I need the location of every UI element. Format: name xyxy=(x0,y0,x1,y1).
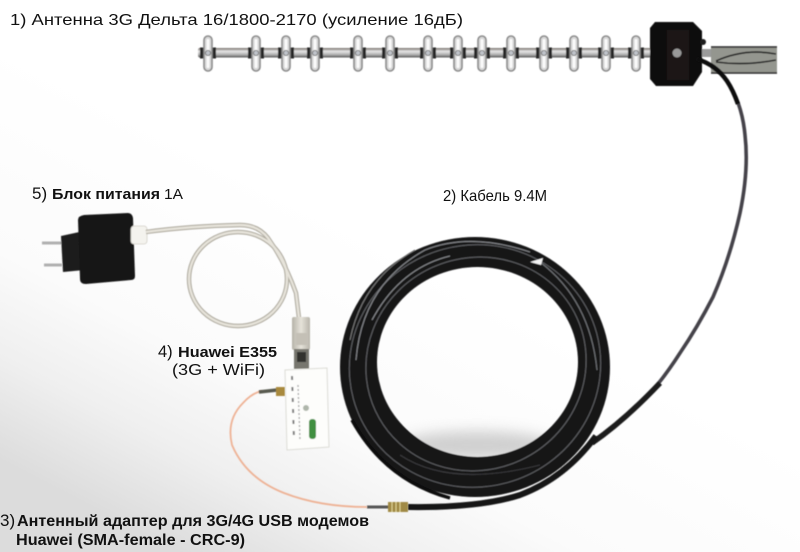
label 3: adapter line 1: 3) xyxy=(0,511,15,530)
label 5: power supply: Блок питания xyxy=(52,186,160,203)
coil highlights xyxy=(322,217,628,515)
USB plug xyxy=(292,317,310,369)
label 4: modem subtitle: (3G + WiFi) xyxy=(172,362,265,379)
USB mini plug xyxy=(131,226,147,244)
white cable label xyxy=(530,258,543,265)
cable tail to connector xyxy=(352,420,450,498)
antenna cable xyxy=(592,59,746,443)
label 2: cable: 2) Кабель 9.4М xyxy=(443,188,547,205)
plug pins xyxy=(42,242,62,266)
modem LED window xyxy=(309,419,316,439)
label 5: power supply: 1А xyxy=(164,187,183,203)
label 3: adapter line 2: Huawei (SMA-female - CRC-9) xyxy=(16,532,245,549)
label 4: modem: 4) xyxy=(158,343,173,361)
modem body xyxy=(285,368,329,450)
label 5: power supply xyxy=(32,184,183,203)
antenna boom xyxy=(198,48,658,58)
USB cable xyxy=(146,225,299,326)
antenna xyxy=(198,22,777,86)
label 4: modem: Huawei E355 xyxy=(178,344,277,361)
orange pigtail cable xyxy=(230,391,367,507)
coil ring xyxy=(340,237,610,497)
pigtail grey end and gold connector xyxy=(259,387,285,396)
Huawei E355 modem xyxy=(285,368,329,450)
SMA/CRC-9 adapter connector xyxy=(367,502,408,512)
mounting bracket xyxy=(700,47,777,73)
coiled cable xyxy=(322,217,628,515)
charger body xyxy=(78,213,135,284)
antenna elements xyxy=(200,36,644,71)
label 1: antenna: 1) Антенна 3G Дельта 16/1800-2170 (усиление 16дБ) xyxy=(10,12,463,29)
coil shadow xyxy=(399,431,555,459)
modem print xyxy=(292,376,294,440)
power adapter xyxy=(42,213,147,284)
label 3: adapter line 1: Антенный адаптер для 3G/4G USB модемов xyxy=(17,513,369,530)
plug block xyxy=(61,231,84,272)
label 5: power supply: 5) xyxy=(32,184,47,203)
antenna connector box xyxy=(650,22,706,86)
